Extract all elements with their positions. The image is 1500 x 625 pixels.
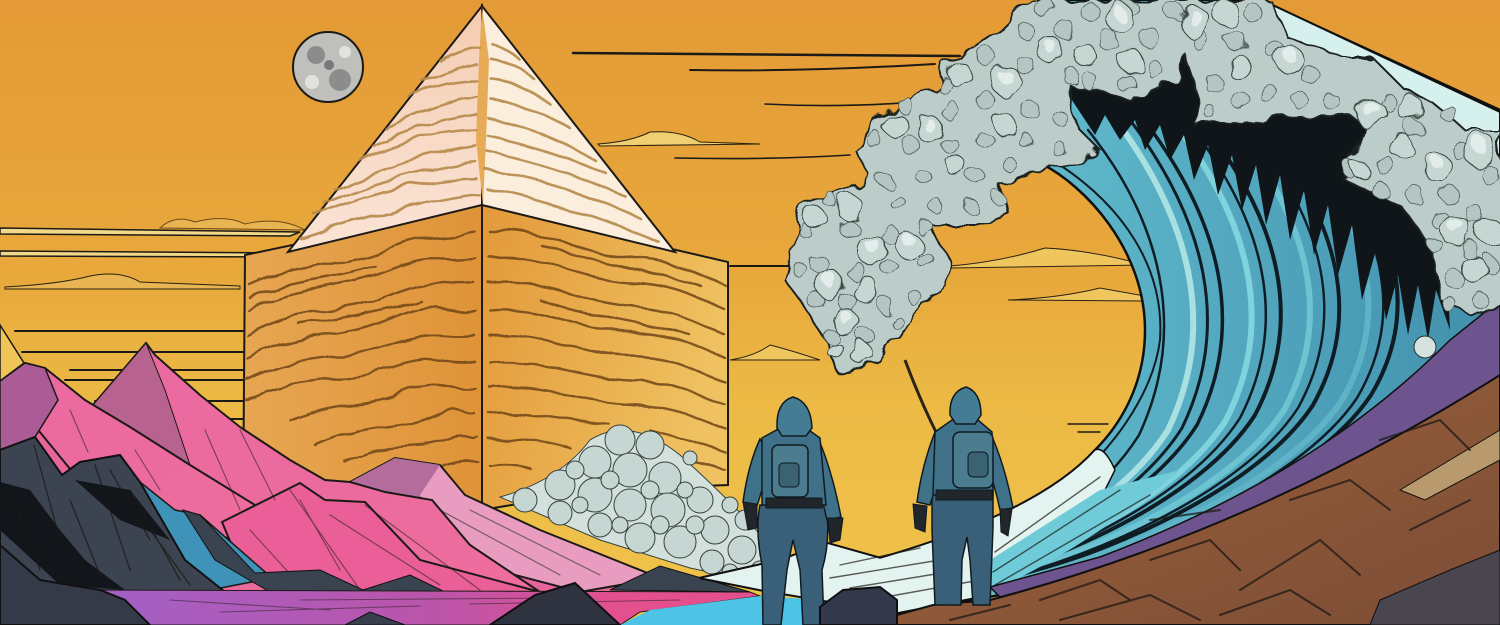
legs [932,490,993,605]
belt and hands [743,498,843,543]
belt and hands [913,490,1012,536]
cyan lower band [990,470,1180,592]
central pink mountain [222,483,540,592]
lake ripples [170,598,680,612]
astronaut right [913,387,1013,605]
block left face [243,205,482,510]
pyramid left face [288,6,482,252]
pale back edge [1262,0,1500,190]
legs [758,505,828,625]
low dark ridge right [610,566,750,592]
dark foreground rock left [0,545,150,625]
purple band [990,300,1500,597]
rose mountain shadow [350,458,440,520]
dark rocks left [0,437,225,596]
backpack [953,432,993,488]
white sweep lines [830,477,1150,598]
block right face [482,205,728,510]
pyramid on a block [243,6,728,510]
white base of wave [700,449,1115,613]
astronaut left [743,397,843,625]
foreground rocks [345,583,897,625]
pyramid ridge [476,6,489,205]
small bubbles [793,0,1499,343]
mountains [0,325,760,625]
backpack pocket [968,452,988,477]
brown ground [897,375,1500,625]
far pink mountain [93,343,540,592]
hood [950,387,981,424]
foam highlights [823,8,1488,323]
moon [293,32,363,102]
left pink mountain [0,363,255,540]
mountain underlay [0,381,750,594]
horizon stripes and clouds [0,53,1145,432]
torso [762,428,826,505]
lake [100,590,760,625]
hood [777,397,812,436]
foam cloud at base of block [500,425,769,584]
dark rock shadows [0,480,170,590]
blue hill [135,478,272,592]
sand peak [0,325,24,381]
arms [743,438,841,520]
strata lines [246,42,725,478]
wave body [700,0,1500,613]
dark curl interior [1062,40,1450,340]
torso [933,420,993,495]
cyan water [620,596,900,625]
large bubbles [804,0,1500,363]
foam mass [785,0,1500,375]
rose mountain right [300,458,660,592]
backpack [772,445,808,497]
rock striations [10,445,190,585]
spray stem [905,360,936,432]
streaks [880,120,1427,590]
far mountain shaded flank [93,343,190,465]
left mountain shaded flank [0,363,58,452]
ridge lines [70,410,600,590]
arms [917,432,1013,510]
blue ridge behind lake [183,510,445,592]
backpack pocket [779,463,799,487]
small foam chunk [1414,336,1436,358]
foam crest [785,0,1500,375]
great wave [700,0,1500,613]
pyramid right face [482,6,675,252]
